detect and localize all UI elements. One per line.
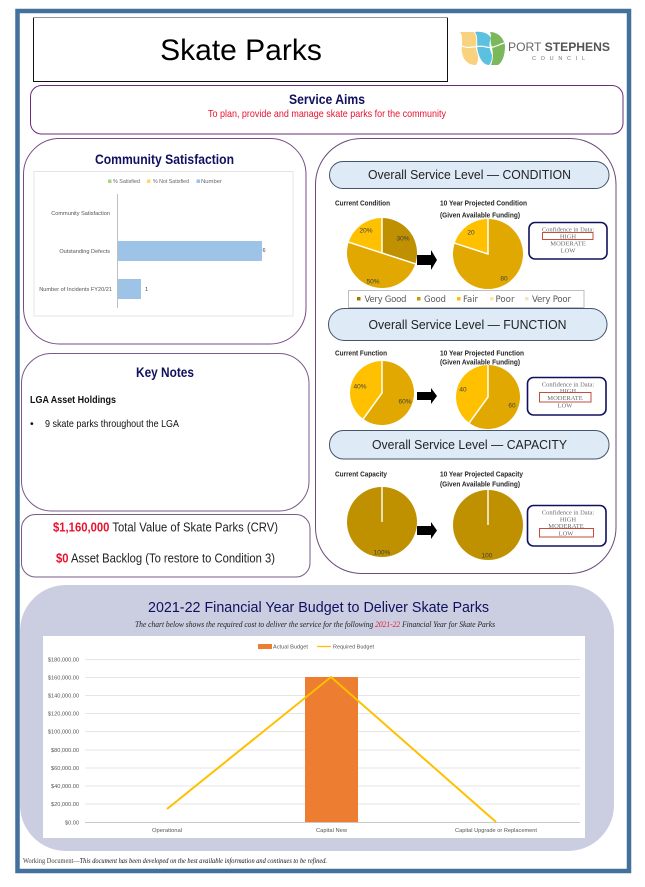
subheading: LGA asset holdings: LGA Asset Holdings [30,394,116,406]
panel: key notes: 9 skate parks throughout the LGA [45,418,179,430]
heading: condition [330,162,609,188]
combo chart: budget: Actual Budget [273,644,308,650]
legend: condition ratings [348,290,584,308]
combo chart: budget: $160,000.00 [48,676,79,682]
combo chart: budget: $0.00 [65,820,79,826]
panel: asset value and backlog [22,514,310,577]
bar chart: satisfaction: % Not Satisfied [153,179,189,185]
label: current capacity: Current Capacity [335,472,387,478]
combo chart: budget: $20,000.00 [51,802,79,808]
bar chart: satisfaction: % Satisfied [113,179,140,185]
label: projected function [440,350,524,366]
panel: community satisfaction [24,138,306,344]
pie: projected function: 40 [459,386,467,394]
confidence: condition: MODERATE [550,240,586,248]
label: projected capacity [440,472,523,488]
confidence: capacity: MODERATE [548,523,584,530]
pie: current condition: 30% [396,236,410,242]
bar chart: satisfaction: 6 [262,248,266,254]
confidence: capacity: LOW [559,530,574,538]
pie: current capacity: 100% [374,550,391,556]
panel: service aims [30,86,623,134]
pie: current function: 40% [353,384,367,390]
confidence: condition: LOW [561,248,576,254]
footer note: Working Document—This document has been developed on the best available information and continues to be refined. [23,856,327,865]
arrow [417,522,437,539]
label: projected capacity: 10 Year Projected Capacity [440,472,523,478]
bar chart: satisfaction: Number [201,179,222,185]
confidence: capacity: HIGH [560,516,576,524]
heading: capacity [330,430,609,459]
heading: service aims: Service Aims [289,92,365,107]
confidence: condition: Confidence in Data: [542,226,594,234]
combo chart: budget: $100,000.00 [48,730,79,736]
title box: Skate Parks [160,34,322,67]
label: projected condition: 10 Year Projected Condition [440,200,527,208]
combo chart: budget: Required Budget [333,644,374,650]
confidence: function [528,378,606,415]
bar chart: satisfaction: Number of Incidents FY20/21 [39,287,112,293]
pie: projected function [456,365,520,429]
bar chart: satisfaction [34,172,293,316]
confidence: condition: HIGH [560,234,576,240]
combo chart: budget: Operational [152,828,182,834]
combo chart: budget: $140,000.00 [48,694,79,700]
arrow [417,250,437,270]
legend: condition ratings: Very Good [364,295,406,305]
heading: community satisfaction: Community Satisfaction [95,151,234,167]
heading: condition: Overall Service Level — CONDITION [368,168,571,182]
pie: projected condition [453,219,523,289]
arrow [417,388,437,404]
pie: current capacity [347,487,417,557]
combo chart: budget: $120,000.00 [48,712,79,718]
label: current function: Current Function [335,350,387,358]
combo chart: budget [43,636,585,838]
confidence: capacity: Confidence in Data: [542,510,594,516]
confidence: function: Confidence in Data: [542,382,594,388]
logo: Port Stephens Council [460,32,610,65]
bar chart: satisfaction: Community Satisfaction [51,211,110,217]
legend: condition ratings: Poor [496,295,515,305]
service aims text: To plan, provide and manage skate parks for the community [208,108,447,120]
pie: projected condition: 20 [467,230,475,236]
logo: Port Stephens Council: COUNCIL [532,56,585,62]
label: projected condition: (Given Available Funding) [440,212,520,220]
heading: function: Overall Service Level — FUNCTION [368,318,566,332]
combo chart: budget: $60,000.00 [51,766,79,772]
label: projected function: 10 Year Projected Function [440,350,524,358]
total value: $1,160,000 Total Value of Skate Parks (CRV) [53,520,278,534]
pie: current function: 60% [398,398,412,406]
heading: function [328,308,607,340]
panel: budget [20,585,614,851]
budget subtitle: The chart below shows the required cost to deliver the service for the following 2021-22 Financial Year for Skate Parks [135,620,495,629]
bar chart: satisfaction: 1 [145,287,148,293]
bullet note: • [30,418,34,430]
pie: projected function: 60 [508,402,516,410]
confidence: function: MODERATE [547,395,583,402]
panel: key notes [22,354,309,511]
combo chart: budget: $40,000.00 [51,784,79,790]
logo: Port Stephens Council: PORT STEPHENS [508,40,610,54]
combo chart: budget: Capital Upgrade or Replacement [455,828,537,834]
heading: capacity: Overall Service Level — CAPACITY [372,438,568,452]
legend: condition ratings: Fair [463,295,478,305]
confidence: capacity [528,506,606,546]
label: current condition: Current Condition [335,200,390,208]
bar chart: satisfaction: Outstanding Defects [59,249,110,255]
heading: key notes: Key Notes [136,364,194,380]
pie: projected capacity: 100 [482,552,493,560]
pie: projected condition: 80 [500,276,508,282]
pie: current condition [347,218,417,288]
label: projected function: (Given Available Funding) [440,360,520,366]
pie: projected capacity [453,490,523,560]
combo chart: budget: Capital New [316,828,348,834]
asset backlog: $0 Asset Backlog (To restore to Condition 3) [56,552,275,566]
title box [33,18,448,82]
legend: condition ratings: Good [424,295,446,305]
panel: overall service level [316,138,616,574]
label: projected capacity: (Given Available Funding) [440,482,520,488]
pie: current condition: 50% [366,278,380,286]
combo chart: budget: $180,000.00 [48,658,79,664]
confidence: function: LOW [558,402,573,410]
pie: current condition: 20% [359,228,373,234]
confidence: function: HIGH [560,388,576,395]
combo chart: budget: $80,000.00 [51,748,79,754]
pie: current function [350,361,414,425]
heading: budget: 2021-22 Financial Year Budget to Deliver Skate Parks [148,600,489,616]
label: projected condition [440,200,527,220]
confidence: condition [529,222,607,259]
legend: condition ratings: Very Poor [532,295,571,305]
